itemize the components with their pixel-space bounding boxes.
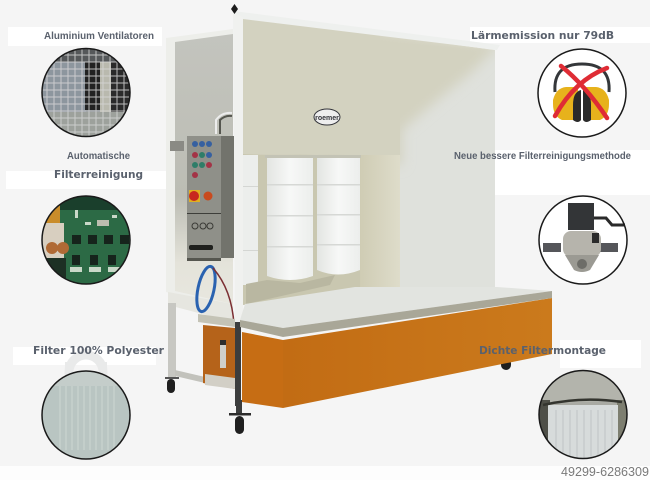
orange base left face (242, 332, 283, 408)
brand logo: roemer (315, 115, 339, 122)
circle outline 2 (42, 196, 130, 284)
blue hose (193, 265, 234, 325)
circle outline 4 (538, 49, 626, 137)
hopper shadow (246, 275, 335, 304)
table top (240, 287, 552, 337)
listing number: 49299-6286309 (561, 465, 649, 479)
circle outline 3 (42, 371, 130, 459)
icon: crossed-out ear defenders (538, 49, 626, 137)
icon: pleated polyester filter (42, 371, 130, 459)
filter cartridge centre (265, 155, 315, 280)
powder coating booth (165, 4, 552, 434)
circle outline 6 (539, 370, 627, 458)
icon: filter mounting (538, 370, 629, 460)
booth left side panel (166, 29, 233, 322)
front post (233, 12, 243, 326)
orange base front face (283, 298, 552, 408)
label: Neue bessere Filterreinigungsmethode: Neue bessere Filterreinigungsmethode (454, 151, 631, 162)
ceiling shading (321, 36, 495, 165)
booth right wall (360, 40, 495, 292)
label backing boxes (6, 27, 650, 368)
label: Aluminium Ventilatoren: Aluminium Ventilatoren (44, 31, 154, 42)
casters (167, 358, 511, 434)
brand logo (314, 109, 340, 125)
circle outline 1 (42, 48, 130, 136)
label: Dichte Filtermontage: Dichte Filtermontage (479, 345, 606, 357)
watermark gear (65, 349, 107, 389)
under table unit (198, 314, 235, 389)
label: Filter 100% Polyester: Filter 100% Polyester (33, 345, 165, 357)
label: Lärmemission nur 79dB: Lärmemission nur 79dB (471, 30, 614, 42)
filter cartridge left (243, 155, 258, 285)
icon: circuit board (42, 196, 130, 284)
corner bracket (231, 4, 238, 14)
label: Automatische: Automatische (67, 151, 130, 162)
label: Filterreinigung: Filterreinigung (54, 169, 143, 181)
booth top panel (243, 18, 380, 155)
booth back wall (360, 155, 400, 292)
icon: fan grille (42, 48, 131, 137)
top edge (233, 11, 500, 50)
circle outline 5 (539, 196, 627, 284)
icon: solenoid valve (539, 196, 627, 284)
control cabinet (170, 113, 234, 261)
frame legs (165, 303, 251, 416)
filter cartridge right (315, 155, 361, 274)
